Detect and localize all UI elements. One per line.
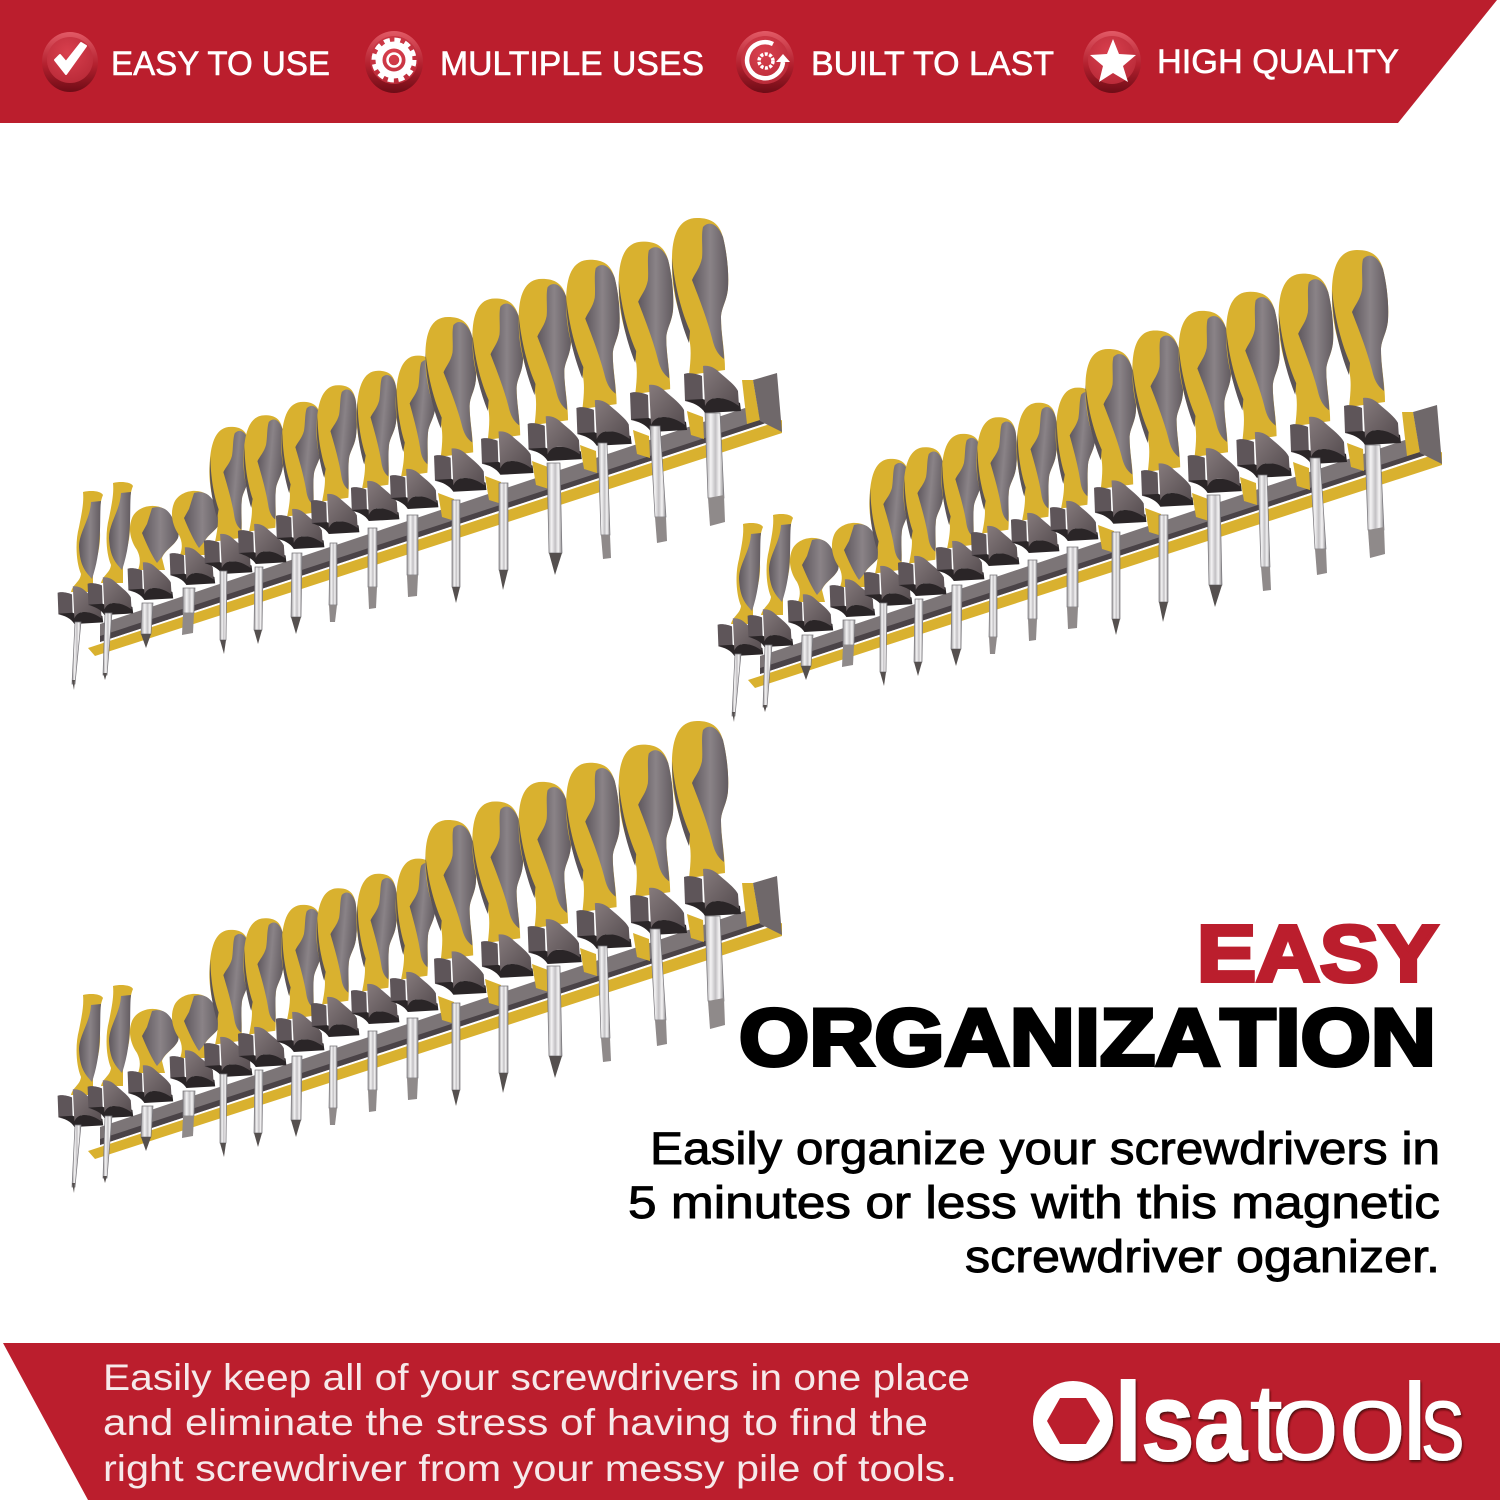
body text: screwdriver oganizer. [965, 1231, 1440, 1282]
logo: Olsatools: s [1421, 1361, 1465, 1484]
body text: 5 minutes or less with this magnetic [628, 1177, 1440, 1228]
screwdriver organizer: bottom left [58, 721, 782, 1193]
top banner [0, 0, 1497, 123]
heading word: organization: ORGANIZATION [739, 993, 1436, 1083]
icon: check mark [42, 32, 98, 92]
icon: gear [365, 31, 423, 93]
bottom banner [3, 1343, 1500, 1500]
label: built to last: BUILT TO LAST [811, 45, 1054, 83]
body text: Easily organize your screwdrivers in [650, 1123, 1440, 1174]
label: high quality: HIGH QUALITY [1157, 43, 1399, 81]
label: easy to use: EASY TO USE [111, 45, 330, 83]
heading: easy organization [739, 909, 1438, 1083]
banner text [103, 1357, 970, 1489]
banner text: and eliminate the stress of having to find the [103, 1402, 928, 1443]
label: multiple uses: MULTIPLE USES [440, 45, 704, 83]
screwdriver organizer: top left [58, 218, 782, 690]
banner shape [3, 1343, 1500, 1500]
logo: Olsatools: lsa [1115, 1361, 1248, 1484]
icon: star [1083, 31, 1141, 93]
screwdriver organizer: top right [718, 250, 1442, 722]
logo: Olsatools: tool [1249, 1360, 1428, 1484]
logo: Olsatools [1032, 1360, 1465, 1484]
banner shape [0, 0, 1497, 123]
heading word: easy: EASY [1197, 909, 1438, 998]
icon: circular arrow with gear [736, 31, 794, 93]
banner text: Easily keep all of your screwdrivers in one place [103, 1357, 970, 1398]
banner text: right screwdriver from your messy pile of tools. [103, 1448, 957, 1489]
logo: Olsatools: O [1032, 1362, 1114, 1483]
body text [628, 1123, 1440, 1282]
